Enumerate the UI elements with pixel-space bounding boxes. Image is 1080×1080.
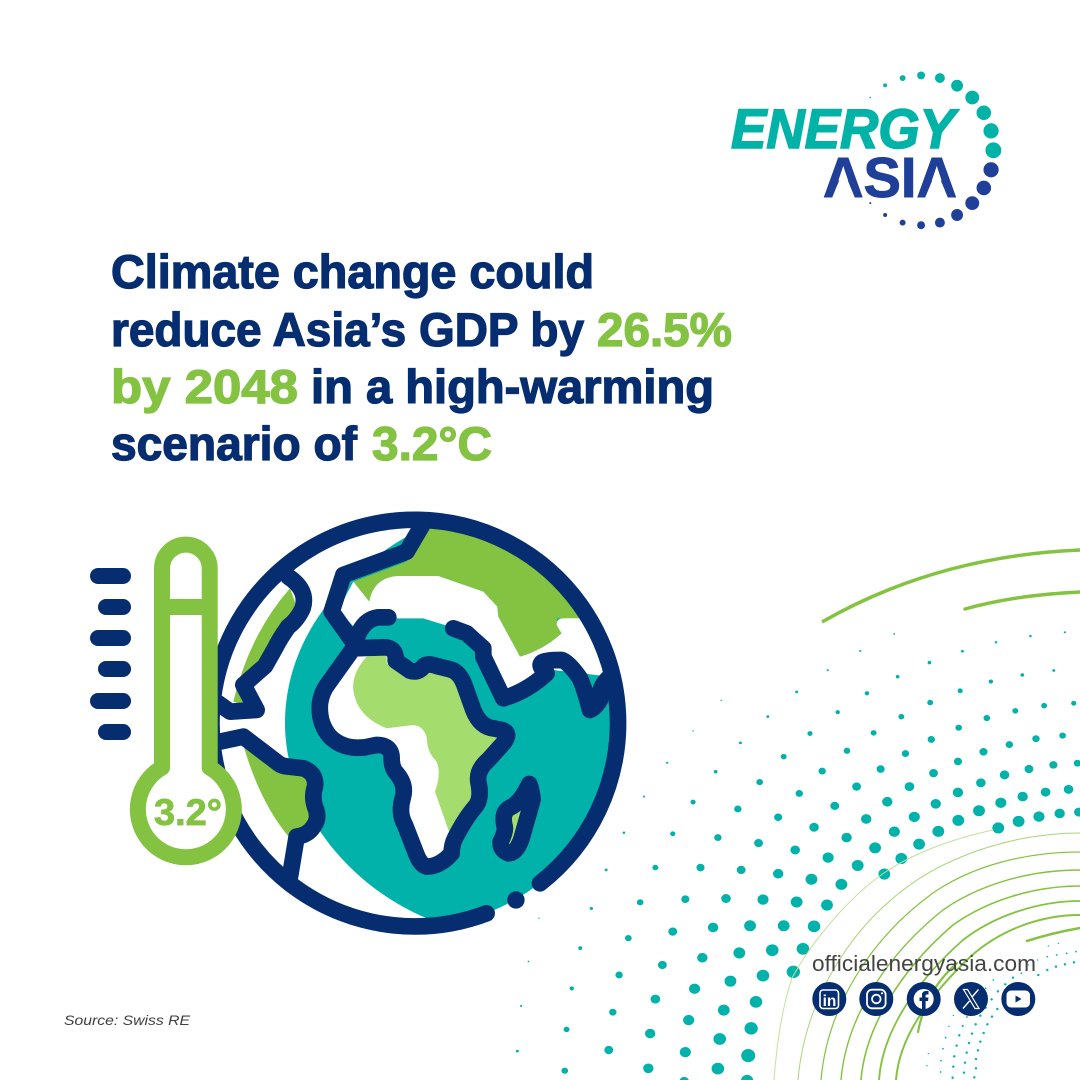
thermometer value: 3.2° (154, 792, 222, 833)
source note: Source: Swiss RE (64, 1012, 191, 1028)
thermometer scale ticks (90, 568, 131, 740)
heading: scenario of (111, 417, 357, 470)
social icons (812, 982, 1035, 1016)
coast: Asia (453, 628, 610, 710)
website url: officialenergyasia.com (812, 951, 1036, 976)
heading: 26.5% (597, 303, 732, 356)
green concentric arcs (774, 550, 1080, 1080)
icon: Instagram (859, 982, 893, 1016)
coast: Mediterranean (355, 617, 388, 643)
logo wordmark: ENERGY: ENERGY (731, 97, 959, 160)
heading: reduce Asia’s GDP by (111, 303, 584, 356)
dot pattern: teal halftone (516, 632, 1080, 1080)
logo: Energy Asia (731, 71, 1001, 229)
icon: thermometer (138, 545, 234, 857)
island: Madagascar (501, 784, 533, 853)
icon: LinkedIn: in (823, 993, 836, 1010)
globe: white land (340, 576, 600, 688)
logo wordmark: ASIA: ASIA (823, 146, 957, 210)
coast: Europe (332, 523, 423, 640)
icon: LinkedIn (812, 982, 846, 1016)
globe: South America landmass (244, 748, 309, 836)
logo dot ring (869, 71, 1001, 229)
coast: Africa (320, 647, 507, 867)
heading: in a high-warming (311, 360, 714, 413)
heading: 3.2°C (372, 417, 492, 470)
globe: Asia landmass (354, 528, 580, 656)
heading (111, 245, 732, 470)
globe ocean (285, 530, 630, 927)
globe ring (211, 520, 618, 926)
dot pattern: small inner dots (926, 943, 1077, 1079)
heading: Climate change could (111, 245, 594, 298)
globe: North America landmass (233, 588, 297, 710)
heading: by 2048 (111, 360, 298, 413)
globe: Africa light green (353, 655, 500, 832)
icon: YouTube (1001, 982, 1035, 1016)
coast: South America (220, 737, 317, 877)
globe ring dot (507, 891, 525, 909)
icon: X (954, 982, 988, 1016)
globe: Africa white (328, 656, 450, 858)
icon: globe (211, 517, 630, 927)
icon: Facebook (907, 982, 941, 1016)
coast: North America (218, 577, 304, 712)
